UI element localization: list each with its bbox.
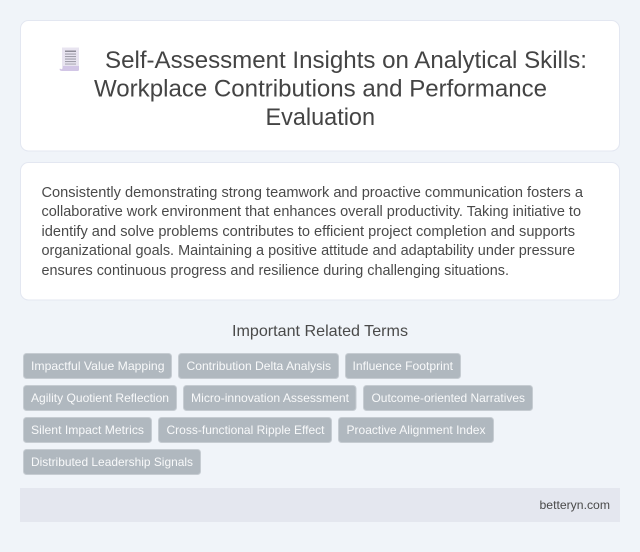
tag: Micro-innovation Assessment [184, 386, 356, 410]
tag: Influence Footprint: Influence Footprint [352, 359, 454, 373]
heading: related terms: Important Related Terms [232, 323, 408, 340]
footer bar [20, 488, 620, 522]
text block: description: ensures continuous progress and resilience during challenging situations. [42, 263, 509, 279]
text block: description [42, 185, 583, 279]
tag: Agility Quotient Reflection [24, 386, 176, 410]
text block: description: identify and solve problems contributes to efficient project completion and supports [42, 224, 575, 240]
tag: Distributed Leadership Signals [24, 450, 200, 474]
tag: Silent Impact Metrics [24, 418, 152, 442]
tag group: related terms [24, 354, 532, 474]
tag: Outcome-oriented Narratives: Outcome-oriented Narratives [372, 391, 525, 405]
tag: Impactful Value Mapping: Impactful Value Mapping [31, 359, 164, 373]
text block: description: collaborative work environment that enhances overall productivity. Taking initiative to [42, 204, 581, 220]
tag: Agility Quotient Reflection: Agility Quotient Reflection [31, 391, 169, 405]
panel: description card [20, 162, 620, 300]
tag: Cross-functional Ripple Effect [158, 418, 332, 442]
tag: Silent Impact Metrics: Silent Impact Metrics [31, 423, 144, 437]
tag: Proactive Alignment Index [338, 418, 494, 442]
icon: document scroll [60, 48, 79, 71]
tag: Contribution Delta Analysis: Contribution Delta Analysis [186, 359, 331, 373]
title: Self-Assessment Insights on Analytical Skills: [105, 47, 587, 74]
title: Evaluation [266, 104, 375, 131]
tag: Proactive Alignment Index: Proactive Alignment Index [346, 423, 486, 437]
tag: Impactful Value Mapping [24, 354, 172, 378]
tag: Cross-functional Ripple Effect: Cross-functional Ripple Effect [166, 423, 325, 437]
footer text: source: betteryn.com [540, 498, 610, 512]
tag: Contribution Delta Analysis [178, 354, 338, 378]
tag: Outcome-oriented Narratives [364, 386, 532, 410]
title [94, 47, 587, 131]
tag: Distributed Leadership Signals: Distributed Leadership Signals [31, 455, 193, 469]
title: Workplace Contributions and Performance [94, 76, 547, 102]
text block: description: Consistently demonstrating strong teamwork and proactive communication fosters a [42, 185, 583, 201]
text block: description: organizational goals. Maintaining a positive attitude and adaptability under pressure [42, 243, 575, 259]
tag: Micro-innovation Assessment: Micro-innovation Assessment [191, 391, 350, 405]
tag: Influence Footprint [346, 354, 460, 378]
panel: title card [20, 20, 620, 151]
